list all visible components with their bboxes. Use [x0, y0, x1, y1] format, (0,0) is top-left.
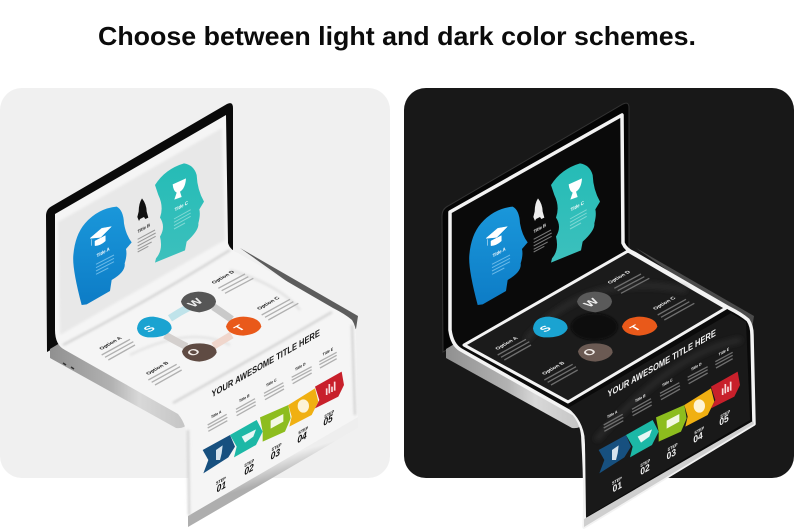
panel: dark scheme [404, 88, 794, 527]
body lines A [492, 255, 510, 274]
blob S [137, 317, 172, 337]
head: Title A [73, 207, 132, 305]
sheet folds [63, 250, 355, 515]
arrow 2 [230, 420, 263, 457]
connector ring [165, 307, 232, 347]
step labels: 04 [297, 430, 307, 446]
step body lines [604, 352, 733, 431]
step labels [216, 409, 334, 496]
step titles: Title D [295, 361, 306, 372]
screen artwork [469, 163, 600, 305]
step titles: Title B [635, 393, 646, 404]
laptop base side [636, 248, 754, 329]
option labels: Option C [652, 296, 678, 311]
arrow 1 [599, 435, 631, 473]
step labels: 01 [613, 479, 623, 496]
blob T [622, 317, 657, 336]
sheet hem [188, 417, 358, 527]
step labels: STEP [324, 409, 334, 419]
head: Title C [155, 163, 204, 263]
laptop lid [442, 103, 629, 352]
blob T: T [628, 324, 644, 333]
icon: graduation cap [486, 227, 507, 246]
step labels: 03 [667, 446, 677, 463]
blob T: T [232, 324, 248, 333]
option labels: Option A [98, 336, 124, 351]
arrow 1 [203, 435, 235, 473]
step labels [612, 409, 730, 496]
blob W [577, 292, 612, 312]
step titles: Title A [607, 409, 618, 420]
label: Title B: Title B [138, 222, 151, 234]
arrow 4 [288, 388, 318, 427]
SWOT artwork [494, 270, 740, 496]
option labels: Option C [256, 296, 282, 311]
step titles: Title E [719, 346, 729, 357]
title: Choose between light and dark color schemes. [98, 21, 696, 51]
heading: YOUR AWESOME TITLE HERE [212, 327, 320, 401]
step titles: Title E [323, 346, 333, 357]
icon: rocket [533, 198, 544, 221]
option labels [98, 270, 282, 376]
step labels: 02 [640, 462, 650, 478]
option labels: Option A [494, 336, 520, 351]
step titles [607, 346, 729, 420]
step labels: 02 [244, 462, 254, 478]
step titles [211, 346, 333, 420]
step labels: 05 [719, 412, 729, 429]
step titles: Title C [266, 377, 277, 388]
head: Title C [551, 163, 600, 263]
step labels: STEP [668, 442, 678, 452]
connector ring [571, 313, 618, 340]
arrow 3 [656, 405, 687, 442]
blob O: O [184, 346, 204, 358]
label: Title B: Title B [534, 222, 547, 234]
arrow 2 [626, 420, 659, 457]
laptop base side [240, 248, 358, 329]
panel: light scheme [0, 88, 390, 527]
body lines A [96, 255, 114, 274]
icon: rocket [137, 198, 148, 221]
blob T [226, 317, 261, 336]
blob W [181, 292, 216, 312]
heading: YOUR AWESOME TITLE HERE [608, 327, 716, 401]
blob S: S [538, 324, 555, 334]
step labels: STEP [272, 442, 282, 452]
icon: graduation cap [90, 227, 111, 246]
option labels: Option B [145, 361, 171, 376]
label: Title C: Title C [571, 200, 584, 214]
sheet hem [584, 421, 754, 527]
step titles: Title C [662, 377, 673, 388]
step labels: STEP [216, 475, 226, 486]
step body lines [208, 352, 337, 431]
option body lines [102, 274, 298, 385]
step labels: 01 [217, 479, 226, 496]
body lines B [138, 230, 156, 252]
blob O [578, 343, 613, 362]
step labels: STEP [612, 475, 622, 486]
printed sheet [55, 115, 358, 527]
step labels: 03 [271, 446, 281, 463]
step labels: 05 [323, 412, 333, 429]
laptop base front [50, 343, 187, 428]
body lines C [174, 210, 191, 229]
blob O [182, 343, 217, 362]
step titles: Title D [691, 361, 702, 372]
icon: trophy [569, 178, 582, 200]
step labels: STEP [640, 458, 650, 468]
option labels [494, 270, 678, 376]
arrow 5 [315, 372, 344, 408]
SWOT artwork [98, 270, 344, 496]
printed sheet [450, 115, 754, 527]
laptop lid [46, 103, 233, 352]
blob S [533, 317, 568, 337]
sheet screen area shade [58, 128, 225, 335]
blob W: W [580, 296, 603, 309]
body lines C [570, 210, 587, 229]
step labels: 04 [693, 430, 703, 446]
step labels: STEP [720, 409, 730, 419]
icon: laptop ports [63, 363, 74, 369]
step labels: STEP [244, 458, 254, 468]
head: Title A [469, 207, 528, 305]
hanging sheet panel [568, 313, 750, 517]
option labels: Option D [607, 270, 632, 285]
option labels: Option D [211, 270, 236, 285]
step labels: STEP [694, 425, 704, 436]
label: Title C: Title C [175, 200, 188, 214]
arrow 5 [711, 372, 740, 408]
option body lines [498, 274, 694, 385]
arrow 3 [260, 405, 291, 442]
keyboard sheet panel [464, 251, 726, 402]
step labels: STEP [298, 425, 308, 436]
option labels: Option B [541, 361, 567, 376]
step titles: Title B [239, 393, 250, 404]
blob W: W [184, 296, 207, 309]
blob O: O [580, 346, 600, 358]
label: Title A: Title A [97, 246, 110, 260]
step titles: Title A [211, 409, 222, 420]
screen artwork [73, 163, 204, 305]
laptop base front [446, 343, 583, 428]
sheet folds [526, 286, 741, 440]
icon: trophy [173, 178, 186, 200]
blob S: S [142, 324, 159, 334]
label: Title A: Title A [493, 246, 506, 260]
arrow 4 [684, 388, 714, 427]
body lines B [534, 230, 552, 252]
